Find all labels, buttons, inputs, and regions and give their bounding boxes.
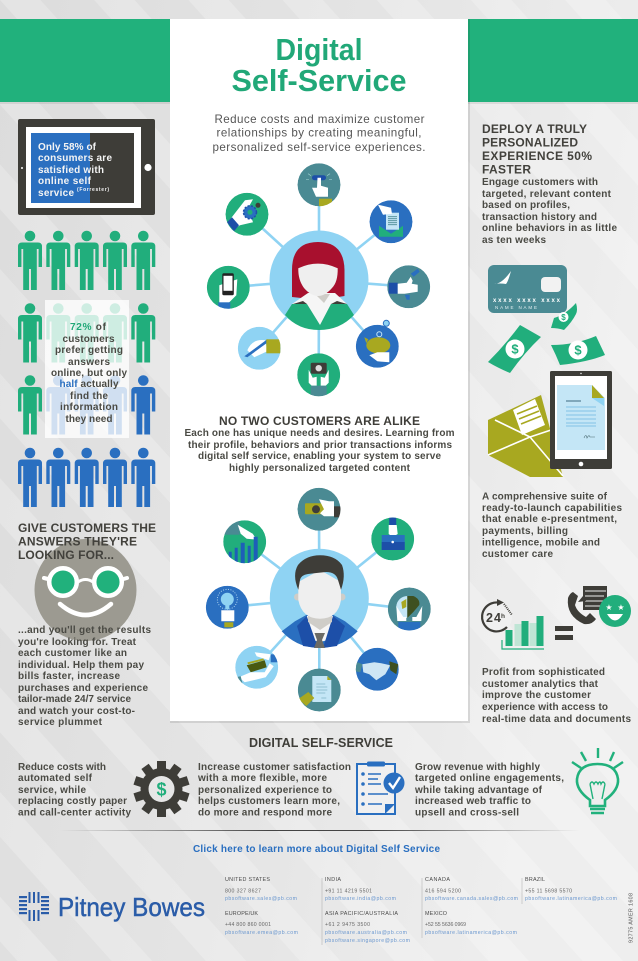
heading: deploy personalized experience: PERSONALIZED bbox=[482, 136, 578, 150]
icon: hand with money bbox=[235, 646, 279, 689]
text block: no two customers: NO TWO CUSTOMERS ARE ALIKE bbox=[219, 414, 420, 428]
text block: no two customers bbox=[184, 414, 455, 474]
icon: credit card: xxxx xxxx xxxx bbox=[493, 298, 561, 304]
contacts: United States, Europe/UK: UNITED STATES bbox=[225, 877, 270, 883]
contacts: India, Asia Pacific: pbsoftware.india@pb.com bbox=[325, 896, 396, 902]
contacts: Brazil: +55 11 5698 5570 bbox=[525, 888, 572, 894]
icon: handshake bbox=[355, 648, 399, 691]
contacts: Canada, Mexico: +52 55 5636 0969 bbox=[425, 922, 466, 928]
icon: equals sign bbox=[555, 626, 573, 640]
text block: increase satisfaction bbox=[197, 762, 351, 818]
panel: tablet statistic: (Forrester) bbox=[77, 187, 109, 193]
text block: profit from analytics: improve the customer bbox=[482, 690, 591, 701]
contacts: India, Asia Pacific: ASIA PACIFIC/AUSTRALIA bbox=[325, 911, 398, 917]
contacts: United States, Europe/UK bbox=[225, 877, 298, 936]
text block: grow revenue: increased web traffic to bbox=[415, 796, 531, 807]
text block: reduce costs bbox=[18, 762, 131, 818]
text block: profit from analytics: customer analytics that bbox=[482, 679, 599, 690]
icon: hand with pen bbox=[238, 327, 281, 370]
contacts: India, Asia Pacific: +91 11 4219 5501 bbox=[325, 888, 372, 894]
text block: grow revenue: Grow revenue with highly bbox=[415, 762, 540, 773]
contacts: Canada, Mexico: pbsoftware.latinamerica@pb.com bbox=[425, 930, 517, 936]
text block: grow revenue bbox=[414, 762, 564, 818]
icon: hand with card bbox=[298, 488, 341, 531]
icon: analytics chart with 24h clock: 24 bbox=[486, 611, 501, 625]
icon: analytics chart with 24h clock: h bbox=[501, 613, 505, 620]
contacts: Brazil: pbsoftware.latinamerica@pb.com bbox=[525, 896, 617, 902]
panel: tablet statistic: service bbox=[38, 188, 74, 199]
diagram: woman customer hub bbox=[207, 163, 430, 397]
contacts: India, Asia Pacific: INDIA bbox=[325, 877, 341, 883]
callout: 72% of customers bbox=[45, 300, 129, 438]
contacts: Brazil: BRAZIL bbox=[525, 877, 545, 883]
icon: phone, chat bubble and smiley: ★ bbox=[605, 603, 613, 612]
logo: Pitney Bowes: Pitney Bowes bbox=[58, 892, 205, 922]
icon: dollar bills: $ bbox=[561, 313, 566, 322]
icon: tablet with document bbox=[550, 371, 612, 469]
text block: grow revenue: while taking advantage of bbox=[414, 785, 543, 796]
icon: gear with dollar bbox=[133, 761, 190, 817]
contacts: Canada, Mexico: MEXICO bbox=[425, 911, 447, 917]
text block: engage customers: based on profiles, bbox=[482, 200, 570, 211]
text block: engage customers: online behaviors in as little bbox=[482, 223, 617, 234]
contacts: United States, Europe/UK: +44 800 860 0001 bbox=[225, 922, 271, 928]
icon: dollar bills: $ bbox=[574, 342, 582, 358]
text block: engage customers: as ten weeks bbox=[482, 235, 546, 246]
text block: increase satisfaction: personalized experience to bbox=[198, 785, 332, 796]
icon: hands with globe bbox=[388, 588, 431, 631]
contacts: Canada, Mexico: CANADA bbox=[425, 877, 450, 883]
text block: grow revenue: upsell and cross-sell bbox=[415, 808, 519, 818]
text block: get the results: purchases and experience bbox=[18, 683, 148, 694]
contacts: Canada, Mexico: pbsoftware.canada.sales@pb.com bbox=[425, 896, 518, 902]
panel: tablet statistic: consumers are bbox=[38, 153, 112, 164]
text block: comprehensive suite: A comprehensive suite of bbox=[482, 492, 608, 502]
contacts: United States, Europe/UK: pbsoftware.emea@pb.com bbox=[225, 930, 298, 936]
text block: get the results: individual. Help them pay bbox=[18, 660, 144, 671]
icon: phone, chat bubble and smiley: ★ bbox=[617, 603, 625, 612]
icon: clipboard with check bbox=[357, 762, 404, 814]
contacts: India, Asia Pacific: pbsoftware.singapore@pb.com bbox=[325, 938, 410, 944]
callout: 72% of customers: online, but only bbox=[51, 368, 127, 379]
heading: deploy personalized experience: EXPERIENCE 50% bbox=[482, 149, 592, 163]
pictogram: customers row 2 bbox=[18, 303, 155, 362]
text block: get the results: and watch your cost-to- bbox=[18, 706, 135, 717]
link: learn more: Click here to learn more about Digital Self Service bbox=[193, 844, 440, 855]
icon: analytics chart with 24h clock bbox=[482, 599, 544, 649]
icon: hand with gear bbox=[226, 193, 268, 236]
text block: increase satisfaction: with a more flexible, more bbox=[197, 773, 327, 784]
text block: increase satisfaction: helps customers learn more, bbox=[198, 796, 340, 807]
pictogram: customers row 3 bbox=[18, 375, 155, 434]
text block: grow revenue: targeted online engagements, bbox=[415, 773, 564, 784]
text block: profit from analytics: experience with access to bbox=[482, 702, 608, 713]
text block: comprehensive suite: customer care bbox=[482, 549, 553, 560]
contacts: India, Asia Pacific: +61 2 9475 3500 bbox=[325, 922, 370, 928]
text block: reduce costs: Reduce costs with bbox=[18, 762, 106, 773]
contacts: Canada, Mexico: 416 594 5200 bbox=[425, 888, 461, 894]
text block: reduce costs: and call-center activity bbox=[18, 808, 131, 818]
icon: hand holding phone bbox=[207, 266, 250, 310]
intro text: Reduce costs and maximize customer bbox=[214, 113, 425, 126]
contacts: United States, Europe/UK: pbsoftware.sales@pb.com bbox=[225, 896, 297, 902]
text block: increase satisfaction: Increase customer satisfaction bbox=[198, 762, 351, 773]
callout: 72% of customers: information bbox=[60, 402, 118, 413]
pictogram: customers row 4 bbox=[18, 448, 155, 507]
text block: engage customers: transaction history and bbox=[482, 212, 597, 223]
icon: gear with dollar: $ bbox=[156, 780, 167, 800]
icon: piggy bank bbox=[356, 320, 399, 368]
text block: comprehensive suite: payments, billing bbox=[482, 526, 568, 537]
intro text bbox=[212, 113, 426, 154]
icon: document bbox=[298, 668, 341, 712]
panel: tablet statistic: Only 58% of bbox=[38, 142, 97, 153]
contacts: Canada, Mexico bbox=[422, 877, 518, 938]
contacts: India, Asia Pacific: pbsoftware.australia@pb.com bbox=[325, 930, 407, 936]
callout: 72% of customers: 72% of bbox=[70, 322, 107, 333]
heading: give customers: ANSWERS THEY'RE bbox=[18, 534, 137, 548]
intro text: personalized self-service experiences. bbox=[212, 141, 426, 154]
title bbox=[232, 32, 406, 98]
reference code: 92775 AMER 1608 bbox=[628, 893, 634, 943]
text block: increase satisfaction: do more and respond more bbox=[198, 808, 332, 818]
heading: give customers bbox=[18, 521, 156, 562]
title: Digital bbox=[276, 32, 362, 67]
heading: give customers: GIVE CUSTOMERS THE bbox=[18, 521, 156, 535]
text block: profit from analytics: Profit from sophisticated bbox=[482, 667, 605, 678]
callout: 72% of customers: half actually bbox=[60, 379, 119, 390]
text block: get the results: service plummet bbox=[18, 717, 103, 728]
contacts: Brazil bbox=[522, 877, 617, 904]
text block: get the results: ...and you'll get the results bbox=[18, 625, 151, 636]
diagram: man customer hub bbox=[206, 488, 431, 712]
text block: comprehensive suite: ready-to-launch capabilities bbox=[482, 503, 622, 514]
text block: get the results bbox=[18, 625, 151, 728]
icon: dollar bills bbox=[488, 303, 605, 373]
text block: comprehensive suite bbox=[482, 492, 622, 560]
text block: reduce costs: service, while bbox=[18, 785, 86, 796]
icon: phone, chat bubble and smiley bbox=[568, 586, 631, 627]
panel: central white column bbox=[170, 19, 470, 723]
icon: briefcase bbox=[371, 517, 414, 560]
green header band bbox=[0, 19, 638, 104]
text block: no two customers: Each one has unique needs and desires. Learning from bbox=[184, 428, 455, 439]
divider bbox=[60, 830, 580, 831]
text block: comprehensive suite: that enable e-presentment, bbox=[482, 514, 617, 525]
contacts: United States, Europe/UK: 800 327 8627 bbox=[225, 888, 261, 894]
text block: reduce costs: replacing costly paper bbox=[18, 796, 127, 807]
text block: profit from analytics bbox=[482, 667, 631, 725]
text block: profit from analytics: real-time data and documents bbox=[482, 714, 631, 725]
icon: lightbulb bbox=[572, 748, 623, 813]
heading: deploy personalized experience: DEPLOY A TRULY bbox=[482, 122, 587, 136]
text block: no two customers: highly personalized targeted content bbox=[229, 463, 411, 474]
icon: credit card: NAME NAME bbox=[495, 305, 537, 310]
portrait: woman bbox=[270, 230, 368, 330]
text block: engage customers: targeted, relevant content bbox=[482, 189, 612, 200]
callout: 72% of customers: customers bbox=[62, 334, 115, 345]
text block: no two customers: their profile, behaviors and prior transactions informs bbox=[188, 440, 452, 451]
icon: smiley with glasses bbox=[34, 539, 136, 641]
text block: get the results: bills faster, increase bbox=[18, 671, 120, 682]
icon: credit card bbox=[488, 265, 567, 313]
contacts: United States, Europe/UK: EUROPE/UK bbox=[225, 911, 258, 917]
heading: deploy personalized experience: FASTER bbox=[482, 162, 531, 176]
panel: tablet statistic bbox=[18, 119, 155, 215]
callout: 72% of customers: prefer getting bbox=[55, 345, 123, 356]
text block: no two customers: digital self service, enabling your system to serve bbox=[198, 451, 441, 462]
title: Self-Service bbox=[232, 63, 406, 98]
icon: hand and bar chart bbox=[223, 520, 266, 564]
text block: reduce costs: automated self bbox=[18, 773, 93, 784]
icon: hands with camera bbox=[297, 353, 340, 397]
icon: hand pressing button bbox=[298, 163, 340, 208]
text block: get the results: each customer like an bbox=[18, 648, 127, 659]
icon: hand with handset bbox=[387, 265, 430, 308]
text block: get the results: you're looking for. Treat bbox=[18, 637, 137, 648]
contacts: India, Asia Pacific bbox=[322, 877, 410, 945]
icon: hand with lightbulb bbox=[206, 586, 249, 629]
callout: 72% of customers: they need bbox=[66, 414, 112, 425]
text block: comprehensive suite: intelligence, mobile and bbox=[482, 538, 600, 548]
panel: tablet statistic: online self bbox=[38, 176, 92, 187]
pictogram: customers row 1 bbox=[18, 231, 155, 290]
heading: give customers: LOOKING FOR... bbox=[18, 548, 114, 562]
portrait: man bbox=[270, 549, 369, 648]
heading: deploy personalized experience bbox=[482, 122, 592, 176]
icon: envelope bbox=[488, 395, 563, 477]
callout: 72% of customers: find the bbox=[70, 391, 108, 402]
text block: get the results: tailor-made 24/7 service bbox=[18, 694, 131, 705]
heading: digital self-service: DIGITAL SELF-SERVICE bbox=[249, 736, 393, 750]
callout: 72% of customers: answers bbox=[68, 357, 110, 368]
icon: document in envelope bbox=[370, 200, 412, 243]
intro text: relationships by creating meaningful, bbox=[216, 126, 422, 140]
icon: dollar bills: $ bbox=[511, 342, 519, 356]
text block: engage customers: Engage customers with bbox=[482, 177, 598, 188]
text block: engage customers bbox=[482, 177, 617, 246]
panel: tablet statistic: satisfied with bbox=[38, 165, 104, 176]
